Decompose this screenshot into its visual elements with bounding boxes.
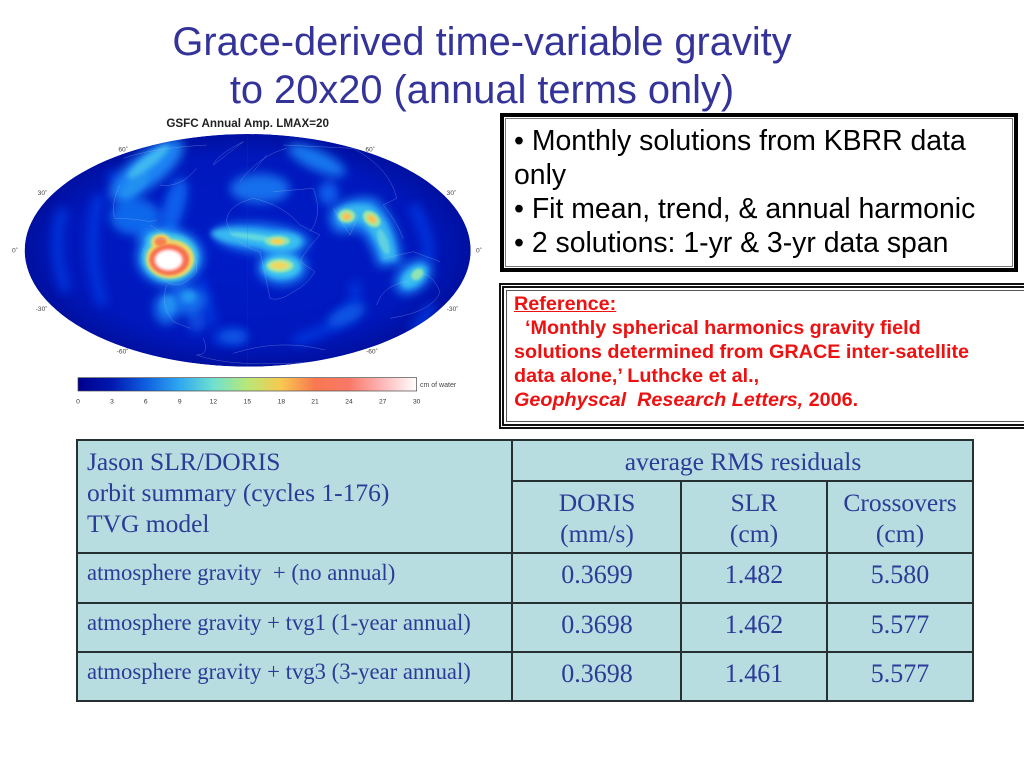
- colour bar: 0: [76, 398, 80, 405]
- bullet text: • 2 solutions: 1-yr & 3-yr data span: [514, 227, 948, 259]
- row 3 values: [561, 659, 929, 688]
- graticule labels: 0˚: [12, 247, 18, 255]
- hot spot: [149, 244, 189, 275]
- table header: Crossovers: Crossovers: [843, 488, 957, 517]
- row 2 values: 1.462: [725, 610, 783, 639]
- graticule labels: 60˚: [118, 146, 128, 154]
- reference text: Reference:: [514, 293, 616, 315]
- reference text: data alone,’ Luthcke et al.,: [514, 365, 759, 387]
- graticule labels: [12, 146, 482, 356]
- table header: Crossovers: (cm): [876, 519, 924, 548]
- colour bar: 6: [144, 398, 148, 405]
- colour bar: 24: [345, 398, 353, 405]
- reference text: ‘Monthly spherical harmonics gravity field: [525, 317, 921, 339]
- bullet text: [514, 125, 975, 259]
- coastlines: [113, 142, 440, 364]
- global map figure: [12, 117, 482, 405]
- graticule labels: -60˚: [366, 348, 378, 356]
- title: [172, 20, 792, 112]
- table header: average RMS residuals: average RMS residuals: [625, 447, 861, 476]
- reference text: solutions determined from GRACE inter-satellite: [514, 341, 969, 363]
- table header: SLR: (cm): [730, 519, 778, 548]
- table header: model column: Jason SLR/DORIS: [87, 447, 280, 476]
- panel: method bullets: [500, 113, 1018, 272]
- table: orbit residual summary: [76, 439, 974, 702]
- reference text: Geophyscal Research Letters, 2006.: [514, 389, 858, 411]
- graticule labels: 60˚: [365, 146, 375, 154]
- row 3 values: 0.3698: [561, 659, 633, 688]
- row 1 values: 5.580: [871, 560, 929, 589]
- colour bar: 3: [110, 398, 114, 405]
- table header: DORIS: (mm/s): [560, 519, 634, 548]
- title: to 20x20 (annual terms only): [230, 68, 734, 112]
- graticule labels: -30˚: [36, 305, 48, 313]
- green and yellow cores: [146, 207, 426, 282]
- colour bar: 27: [379, 398, 387, 405]
- bullet text: • Fit mean, trend, & annual harmonic: [514, 193, 975, 225]
- table header: model column: orbit summary (cycles 1-176): [87, 478, 389, 507]
- graticule labels: -30˚: [447, 305, 459, 313]
- bullet text: only: [514, 159, 566, 191]
- title: Grace-derived time-variable gravity: [172, 20, 792, 64]
- row 2 values: 0.3698: [561, 610, 633, 639]
- cyan bands: [117, 141, 431, 314]
- colour bar: 15: [244, 398, 251, 405]
- colour bar: 9: [178, 398, 182, 405]
- row 1 values: [561, 560, 929, 589]
- reference text: [514, 293, 969, 411]
- graticule labels: -60˚: [117, 348, 129, 356]
- table header: model column: TVG model: [87, 509, 210, 538]
- table header: SLR: SLR: [731, 488, 777, 517]
- colour bar: 30: [413, 398, 421, 405]
- row 3 label: atmosphere gravity + tvg3 (3-year annual): [87, 659, 471, 684]
- table header: model column: [87, 447, 389, 538]
- row 3 values: 5.577: [871, 659, 929, 688]
- broad blue halos: [101, 129, 439, 344]
- colour bar: [76, 378, 457, 405]
- row 2 label: atmosphere gravity + tvg1 (1-year annual): [87, 610, 471, 635]
- map ellipse with annual amplitude field: [25, 129, 471, 367]
- table header: DORIS: DORIS: [559, 488, 635, 517]
- row 3 values: 1.461: [725, 659, 783, 688]
- graticule labels: 30˚: [447, 189, 456, 197]
- map title: GSFC Annual Amp. LMAX=20: [166, 117, 329, 130]
- row 1 values: 1.482: [725, 560, 783, 589]
- table header: SLR: [730, 488, 778, 548]
- row 2 values: [561, 610, 929, 639]
- row 2 values: 5.577: [871, 610, 929, 639]
- colour bar: 21: [311, 398, 319, 405]
- row 1 values: 0.3699: [561, 560, 633, 589]
- panel: reference: [499, 283, 1024, 429]
- row 1 label: atmosphere gravity + (no annual): [87, 560, 395, 585]
- table header: Crossovers: [843, 488, 957, 548]
- colour bar: cm of water: [420, 382, 457, 389]
- colour bar: 18: [278, 398, 285, 405]
- colour bar: 12: [210, 398, 217, 405]
- graticule labels: 0˚: [476, 247, 482, 255]
- table header: DORIS: [559, 488, 635, 548]
- bullet text: • Monthly solutions from KBRR data: [514, 125, 966, 157]
- graticule labels: 30˚: [38, 189, 47, 197]
